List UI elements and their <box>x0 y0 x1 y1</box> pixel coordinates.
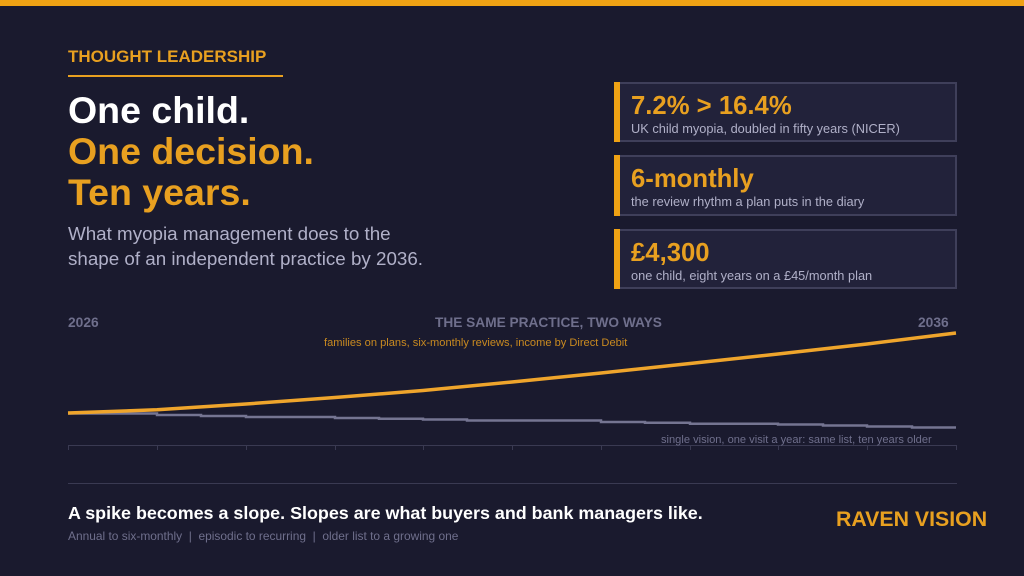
footer takeaway: A spike becomes a slope. Slopes are what buyers and bank managers like. <box>68 503 703 523</box>
title: Ten years. <box>68 171 251 213</box>
stat card: value: one child, eight years on a £45/month plan <box>631 268 872 283</box>
footer supporting text: Annual to six-monthly | episodic to recurring | older list to a growing one <box>68 529 458 543</box>
stat card: value: £4,300 <box>631 239 710 267</box>
chart end year: 2036 <box>918 315 949 330</box>
grey line label: single vision, one visit a year: same list, ten years older <box>661 434 932 446</box>
orange line label: families on plans, six-monthly reviews, income by Direct Debit <box>324 337 627 349</box>
stat card: myopia <box>614 82 957 142</box>
chart axis <box>68 445 956 450</box>
top accent bar <box>0 0 1024 6</box>
grey line: single vision <box>68 414 956 428</box>
title <box>68 89 314 213</box>
stat card: myopia: UK child myopia, doubled in fifty years (NICER) <box>631 121 900 136</box>
subtitle: What myopia management does to the <box>68 223 391 244</box>
stat card: review rhythm: the review rhythm a plan puts in the diary <box>631 194 864 209</box>
brand name: RAVEN VISION <box>836 507 987 531</box>
subtitle: shape of an independent practice by 2036. <box>68 248 423 268</box>
title: One child. <box>68 89 249 131</box>
chart start year: 2026 <box>68 315 99 330</box>
footer divider <box>68 483 957 484</box>
eyebrow heading: THOUGHT LEADERSHIP <box>68 47 266 66</box>
stat card: value <box>614 229 957 289</box>
orange line: myopia management <box>68 333 956 413</box>
subtitle <box>68 223 423 269</box>
eyebrow underline <box>68 75 283 77</box>
stat card: myopia: 7.2% > 16.4% <box>631 92 792 120</box>
title: One decision. <box>68 130 314 172</box>
stat card: review rhythm: 6-monthly <box>631 165 754 193</box>
stat card: review rhythm <box>614 155 957 216</box>
chart heading: THE SAME PRACTICE, TWO WAYS <box>435 315 662 330</box>
